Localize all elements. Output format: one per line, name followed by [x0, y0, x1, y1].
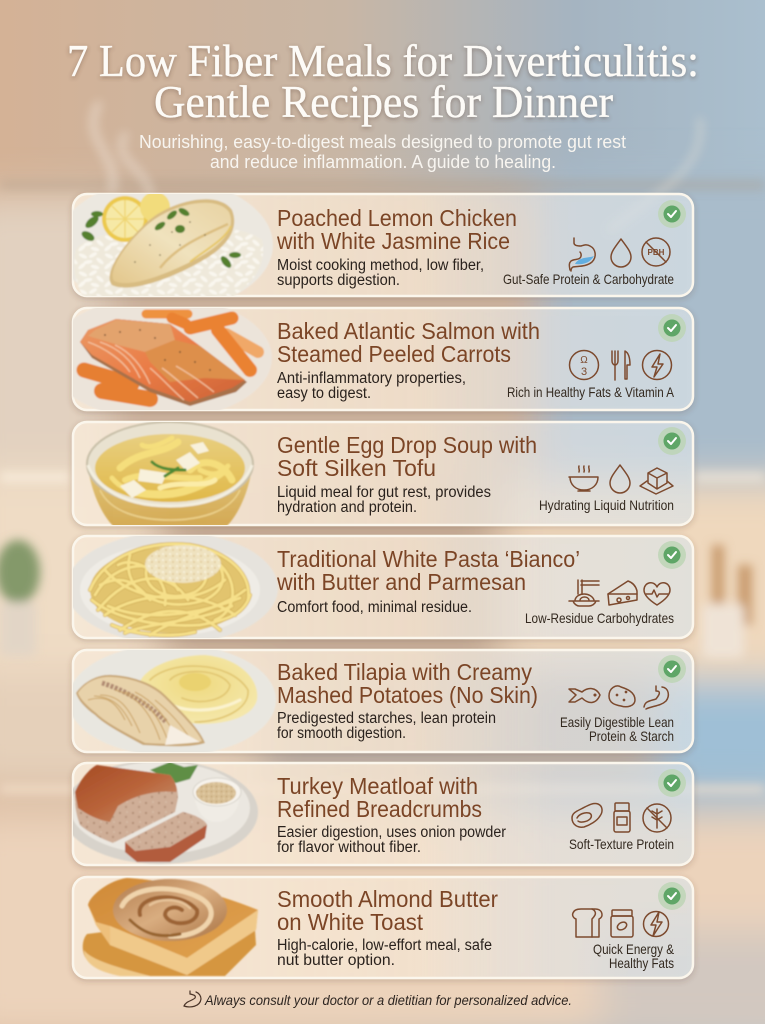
verified badge [658, 769, 686, 797]
heading: Refined Breadcrumbs [277, 796, 482, 822]
description: hydration and protein. [277, 499, 417, 516]
title [67, 35, 699, 127]
description: Anti-inflammatory properties, [277, 370, 466, 387]
heading [277, 773, 482, 822]
icons: omega 3, cutlery, energy: 3 [581, 366, 587, 378]
heading: Smooth Almond Butter [277, 886, 498, 912]
icon caption: Soft-Texture Protein [569, 836, 674, 852]
heading [276, 205, 517, 254]
subtitle: Nourishing, easy-to-digest meals designed to promote gut rest [139, 131, 626, 152]
subtitle [139, 131, 626, 172]
heading: with White Jasmine Rice [276, 228, 510, 254]
subtitle: and reduce inflammation. A guide to healing. [210, 151, 556, 172]
icon caption: Rich in Healthy Fats & Vitamin A [507, 384, 675, 400]
panel: white pasta bianco [66, 532, 693, 644]
icon caption: Quick Energy & [593, 941, 675, 957]
icons: noodles, cheese, heart [569, 580, 670, 606]
description [277, 710, 496, 742]
description [277, 484, 491, 516]
verified badge [658, 541, 686, 569]
heading: with Butter and Parmesan [276, 569, 526, 595]
food image: salmon and carrots [73, 308, 272, 410]
heading [276, 546, 580, 595]
food image: soup bowl [87, 422, 253, 535]
description: Predigested starches, lean protein [277, 710, 496, 727]
heading: Soft Silken Tofu [277, 455, 436, 481]
panel: egg drop soup [73, 422, 693, 535]
title: 7 Low Fiber Meals for Diverticulitis: [67, 35, 699, 86]
icon caption: Easily Digestible Lean [560, 714, 674, 730]
heading: Poached Lemon Chicken [277, 205, 517, 231]
icon caption [593, 941, 675, 971]
verified badge [658, 427, 686, 455]
heading: Baked Tilapia with Creamy [277, 659, 532, 685]
heading: Mashed Potatoes (No Skin) [277, 682, 538, 708]
icon caption: Protein & Starch [589, 728, 674, 744]
heading: on White Toast [277, 909, 423, 935]
steam wisps [93, 105, 700, 230]
heading [277, 318, 540, 367]
description [277, 370, 466, 402]
heading [277, 432, 537, 481]
heading: Turkey Meatloaf with [277, 773, 478, 799]
description: for smooth digestion. [277, 725, 406, 742]
icon caption: Healthy Fats [609, 955, 674, 971]
verified badge [658, 882, 686, 910]
description: Easier digestion, uses onion powder [277, 824, 506, 841]
description: easy to digest. [277, 385, 371, 402]
food image: chicken and rice [73, 194, 273, 296]
icons: meat, spice jar, no grain [572, 803, 671, 832]
description: High-calorie, low-effort meal, safe [277, 937, 492, 954]
panel: poached lemon chicken [69, 192, 697, 302]
icon: stomach [184, 991, 201, 1007]
description [277, 937, 492, 969]
icons: fish, potato, stomach [569, 686, 668, 709]
description: supports digestion. [277, 272, 400, 289]
description: Comfort food, minimal residue. [277, 599, 472, 616]
heading: Gentle Egg Drop Soup with [277, 432, 537, 458]
verified badge [658, 655, 686, 683]
description [277, 257, 484, 289]
description: Moist cooking method, low fiber, [277, 257, 484, 274]
icons: omega 3, cutlery, energy: Ω [580, 355, 588, 366]
description: nut butter option. [277, 952, 395, 969]
description: Liquid meal for gut rest, provides [277, 484, 491, 501]
food image: pasta plate [73, 536, 278, 638]
footer disclaimer: Always consult your doctor or a dietitian for personalized advice. [204, 992, 572, 1008]
panel: almond butter toast [73, 877, 693, 978]
heading: Baked Atlantic Salmon with [277, 318, 540, 344]
panel: baked salmon [69, 306, 697, 416]
description: for flavor without fiber. [277, 839, 421, 856]
icon caption [560, 714, 674, 744]
icons: bread, jar, energy [573, 909, 668, 937]
verified badge [658, 200, 686, 228]
heading [277, 886, 498, 935]
title: Gentle Recipes for Dinner [154, 76, 613, 127]
food image: meatloaf [62, 760, 258, 864]
food image: tilapia and mash [73, 650, 276, 752]
panel: baked tilapia [68, 644, 693, 756]
heading: Steamed Peeled Carrots [277, 341, 511, 367]
description [277, 824, 506, 856]
verified badge [658, 314, 686, 342]
panel: turkey meatloaf [62, 760, 693, 865]
icons: soup bowl, drop, tofu [569, 465, 673, 494]
food image: toast [83, 878, 258, 976]
heading: Traditional White Pasta ‘Bianco’ [277, 546, 580, 572]
icons: stomach, water drop, pH [569, 238, 670, 271]
decorative plant and utensils, blurred [0, 540, 752, 658]
icon caption: Hydrating Liquid Nutrition [539, 497, 674, 513]
icons: stomach, water drop, pH: PBH [648, 248, 665, 257]
icons: omega 3, cutlery, energy [570, 350, 672, 380]
icon caption: Gut-Safe Protein & Carbohydrate [503, 271, 674, 287]
heading [277, 659, 538, 708]
icon caption: Low-Residue Carbohydrates [525, 610, 674, 626]
